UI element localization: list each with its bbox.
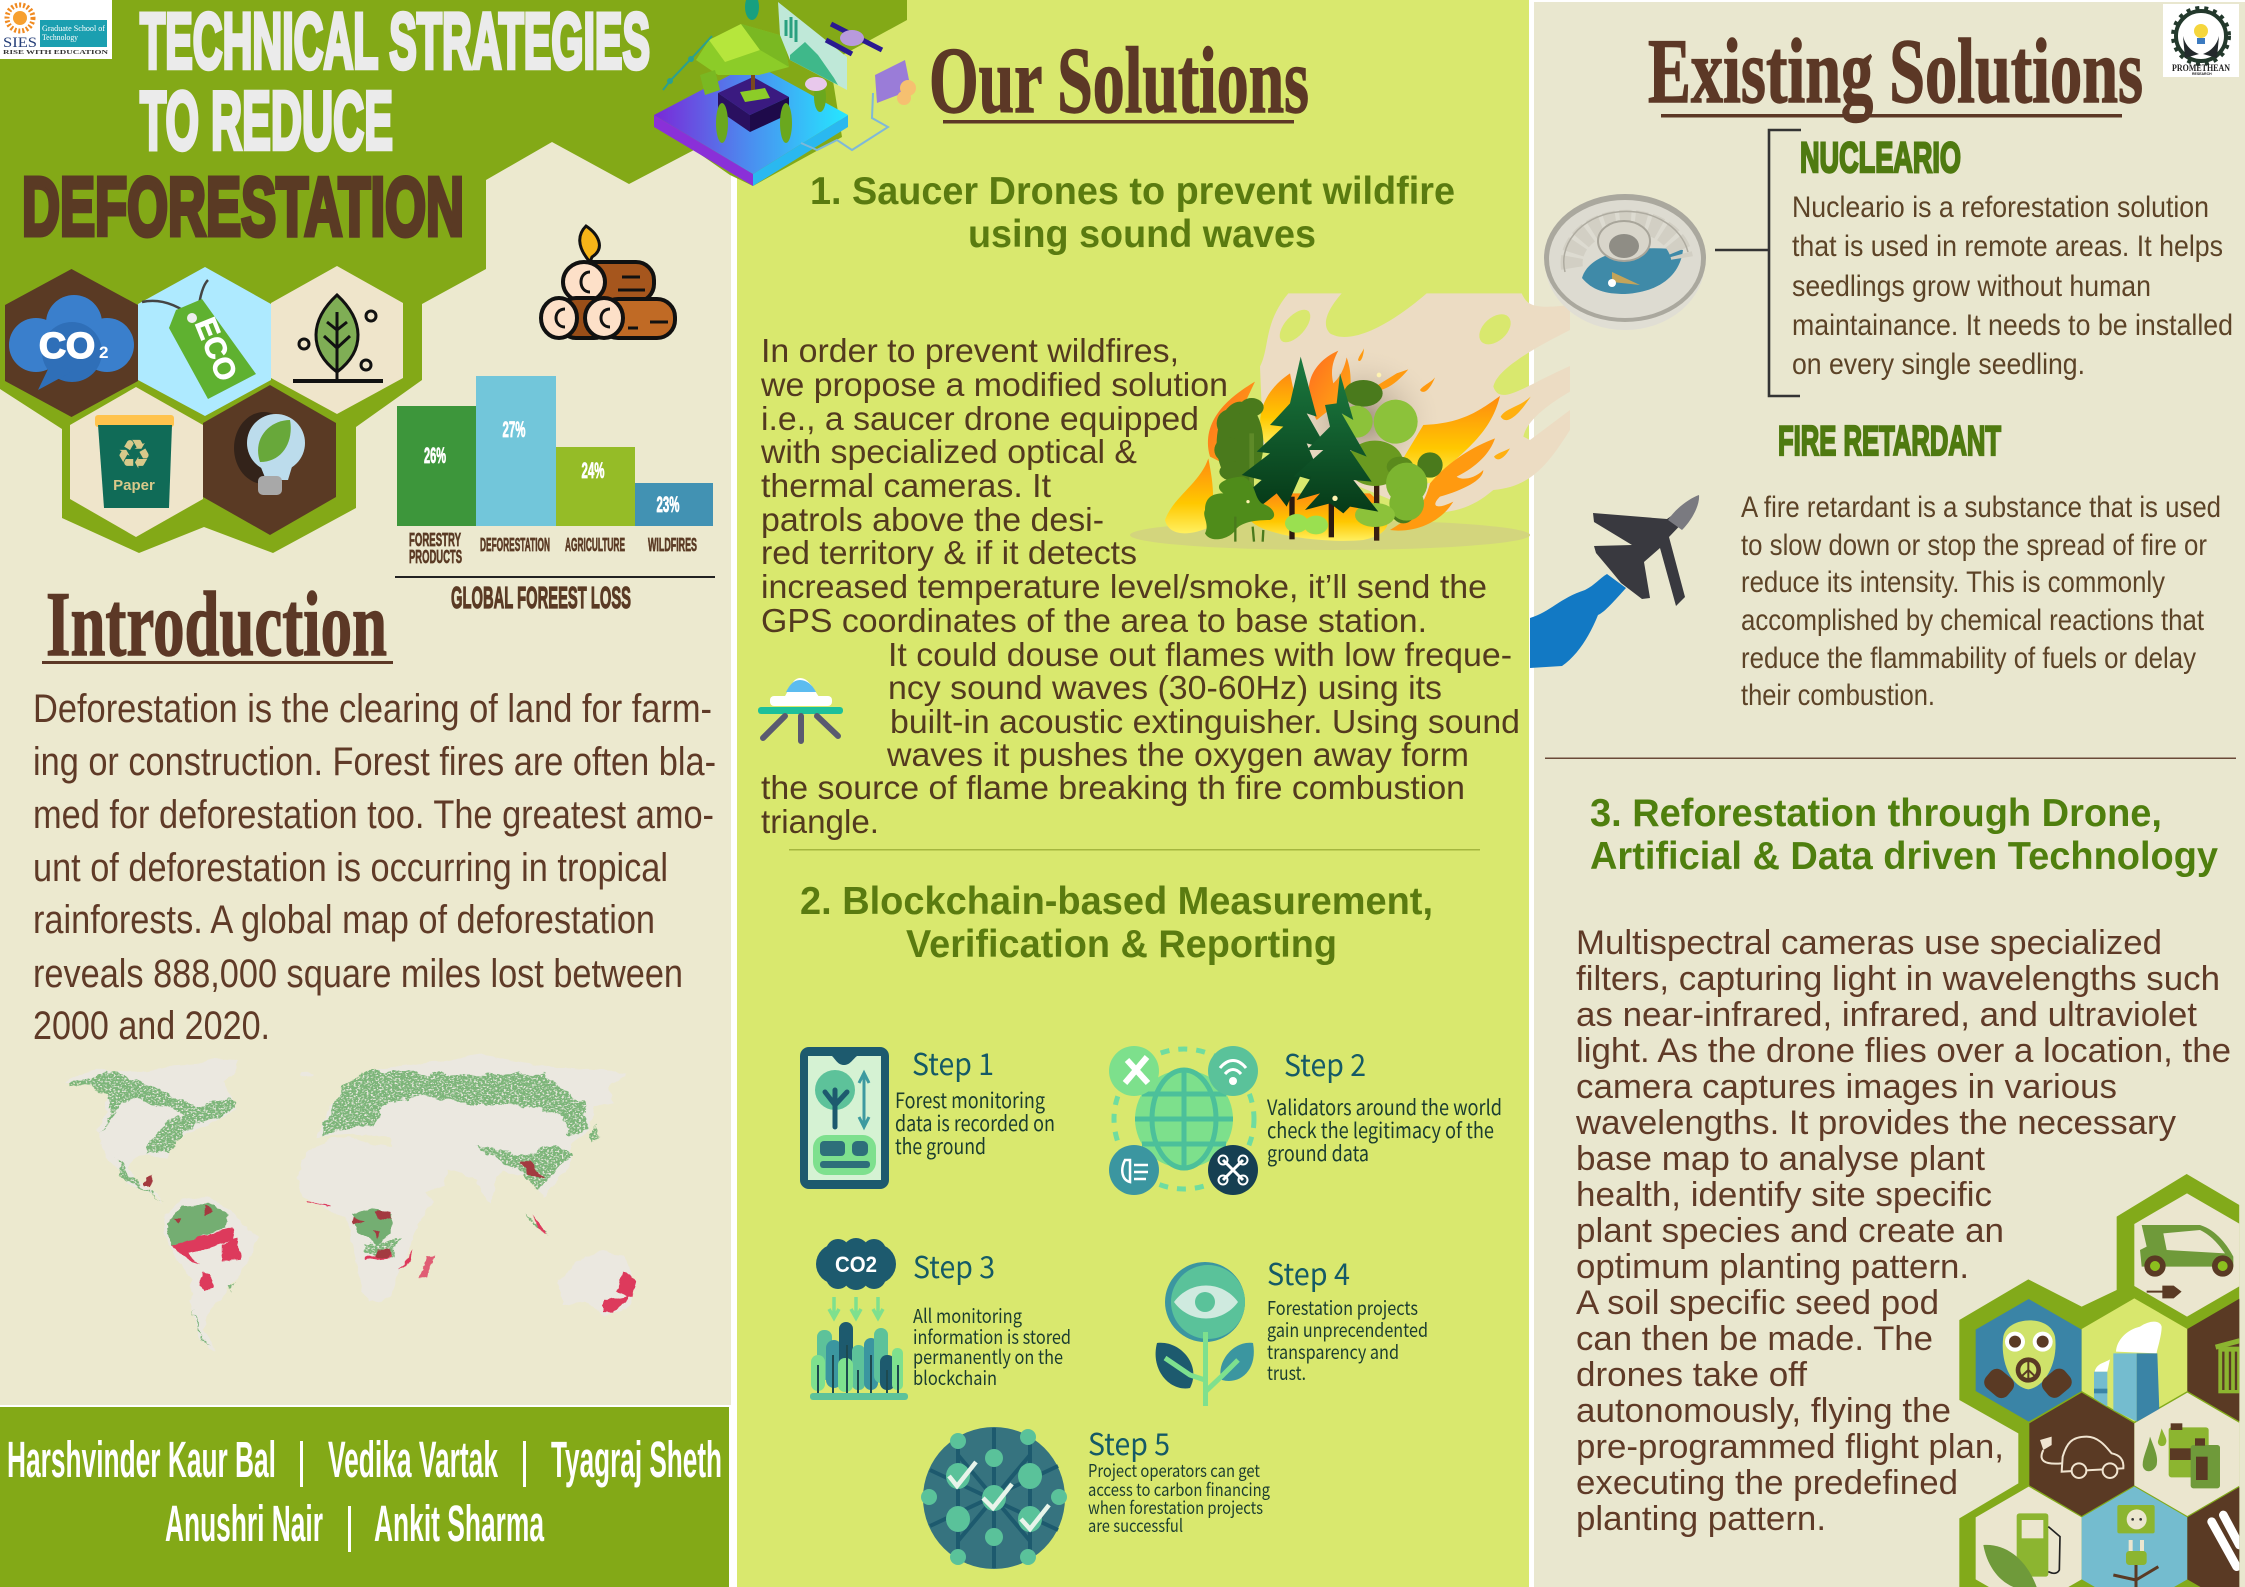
- chart category labels: PRODUCTS: [409, 547, 462, 567]
- hexagon: CO2 cloud: 2: [99, 343, 108, 362]
- bar: forestry products 26%: 26%: [424, 443, 446, 468]
- step 2 label: Step 2: [1284, 1041, 1366, 1085]
- logo: SIES: [0, 0, 112, 59]
- panel: left column background: [0, 0, 731, 1405]
- panel: authors footer: Vedika Vartak: [328, 1431, 498, 1488]
- logo: SIES: RISE WITH EDUCATION: [3, 50, 109, 56]
- step 3 label: Step 3: [913, 1243, 995, 1287]
- text block: introduction: med for deforestation too. The greatest amo-: [33, 793, 714, 837]
- hexagon: ECO tag: [138, 267, 271, 416]
- step 1: [800, 1040, 1055, 1189]
- step 1 text: [895, 1085, 1055, 1161]
- text block: solution 1 description: triangle.: [761, 803, 879, 840]
- text block: introduction: unt of deforestation is occurring in tropical: [33, 846, 668, 890]
- heading: solution 3: 3. Reforestation through Drone,: [1590, 792, 2162, 835]
- text block: solution 3 description: Multispectral cameras use specialized: [1576, 924, 2162, 962]
- text block: introduction: ing or construction. Forest fires are often bla-: [33, 740, 716, 784]
- bar: deforestation 27%: 27%: [502, 417, 526, 442]
- icon: nucleario device: [1544, 194, 1706, 330]
- hexagon: socket and plug: [2082, 1487, 2187, 1587]
- heading: solution 3: Artificial & Data driven Technology: [1590, 835, 2218, 878]
- hexagon: CO2 cloud: CO: [39, 325, 95, 366]
- text block: solution 1 description: built-in acoustic extinguisher. Using sound: [890, 703, 1520, 740]
- step 3 text: All monitoring: [913, 1302, 1022, 1329]
- text block: solution 3 description: as near-infrared, infrared, and ultraviolet: [1576, 996, 2198, 1034]
- text block: solution 3 description: drones take off: [1576, 1356, 1808, 1394]
- text block: nucleario: seedlings grow without human: [1792, 270, 2151, 303]
- icon: plane spraying retardant: [1530, 495, 1699, 668]
- text block: solution 3 description: base map to analyse plant: [1576, 1140, 1986, 1178]
- hexagon: bio fuel pump: [1976, 1487, 2082, 1587]
- bar chart: global forest loss: WILDFIRES: [648, 535, 697, 555]
- step 1 label: Step 1: [912, 1040, 994, 1084]
- text block: solution 3 description: optimum planting pattern.: [1576, 1248, 1969, 1286]
- icon: CO2 cloud over trees: [810, 1238, 908, 1400]
- bar: agriculture 24%: 24%: [582, 458, 604, 483]
- panel: authors footer: [0, 1407, 729, 1587]
- text block: solution 1 description: patrols above the desi-: [761, 501, 1104, 538]
- world map of deforestation: [66, 1054, 637, 1350]
- hexagon: factory: [2082, 1298, 2187, 1422]
- text block: introduction: 2000 and 2020.: [33, 1004, 270, 1048]
- heading: Fire retardant: FIRE RETARDANT: [1778, 417, 2001, 464]
- logo: SIES: Graduate School of: [42, 24, 105, 33]
- icon: globe with nodes: [1109, 1046, 1258, 1195]
- title: TO REDUCE: [140, 74, 393, 167]
- text block: introduction: reveals 888,000 square miles lost between: [33, 952, 683, 996]
- hexagon: ECO tag: ECO: [188, 313, 243, 386]
- logo: Promethean: [2163, 4, 2239, 77]
- text block: solution 1 description: It could douse out flames with low freque-: [888, 636, 1512, 673]
- step 1 text: the ground: [895, 1131, 986, 1161]
- icon: verified network globe: [921, 1427, 1067, 1569]
- text block: solution 3 description: light. As the drone flies over a location, the: [1576, 1032, 2231, 1070]
- heading: Our Solutions: Our Solutions: [929, 29, 1309, 133]
- panel: authors footer: Harshvinder Kaur Bal: [7, 1431, 276, 1488]
- step 4 text: gain unprecendented: [1267, 1316, 1428, 1343]
- heading: Introduction: Introduction: [46, 573, 387, 675]
- chart category labels: DEFORESTATION: [480, 535, 550, 555]
- step 5: [921, 1420, 1270, 1569]
- bar: wildfires 23%: 23%: [656, 492, 680, 517]
- connector bracket: [1715, 130, 1801, 396]
- text block: solution 3 description: plant species and create an: [1576, 1212, 2004, 1250]
- step 5 label: Step 5: [1088, 1420, 1170, 1464]
- step 3 text: blockchain: [913, 1364, 997, 1391]
- hexagon: paper bin: Paper: [113, 477, 155, 494]
- icon: hexagon grid: [5, 266, 403, 537]
- hexagon: gas mask: [1976, 1299, 2082, 1422]
- heading: solution 1: [810, 170, 1455, 256]
- step 2 text: check the legitimacy of the: [1267, 1115, 1494, 1145]
- step 1 text: data is recorded on: [895, 1108, 1055, 1138]
- icon: log pile: [541, 226, 675, 338]
- text block: introduction: [33, 687, 716, 1048]
- step 5 text: when forestation projects: [1088, 1495, 1263, 1520]
- step 3 text: permanently on the: [913, 1343, 1063, 1370]
- heading: solution 1: using sound waves: [968, 213, 1316, 256]
- text block: solution 3 description: autonomously, flying the: [1576, 1392, 1951, 1430]
- icon: eye flower: [1156, 1262, 1254, 1406]
- step 2 text: Validators around the world: [1267, 1092, 1502, 1122]
- heading: Our Solutions: [929, 29, 1309, 133]
- text block: solution 3 description: A soil specific seed pod: [1576, 1284, 1939, 1322]
- step 1 text: Forest monitoring: [895, 1085, 1045, 1115]
- step 3 text: information is stored: [913, 1323, 1071, 1350]
- hexagon: electric car: [2134, 1193, 2240, 1317]
- icon: CO2 cloud over trees: CO2: [835, 1252, 877, 1277]
- hexagon: paper bin: ♻: [116, 432, 152, 478]
- chart category labels: [409, 530, 697, 567]
- heading: Nucleario: NUCLEARIO: [1800, 134, 1961, 182]
- text block: solution 3 description: [1575, 924, 2231, 1538]
- text block: solution 3 description: wavelengths. It provides the necessary: [1575, 1104, 2176, 1142]
- text block: solution 3 description: filters, capturing light in wavelengths such: [1576, 960, 2220, 998]
- step 5 text: are successful: [1088, 1513, 1183, 1538]
- text block: solution 1 description: with specialized optical &: [760, 433, 1137, 470]
- text block: solution 1 description: waves it pushes the oxygen away form: [886, 736, 1469, 773]
- step 5 text: [1088, 1458, 1270, 1538]
- text block: fire retardant: their combustion.: [1741, 679, 1935, 712]
- text block: solution 1 description: GPS coordinates of the area to base station.: [761, 602, 1427, 639]
- panel: authors footer: Ankit Sharma: [374, 1495, 544, 1552]
- step 3: [810, 1238, 1071, 1400]
- text block: solution 3 description: planting pattern.: [1576, 1500, 1826, 1538]
- step 4 label: Step 4: [1267, 1250, 1350, 1294]
- step 4 text: [1267, 1294, 1428, 1386]
- bar: agriculture 24%: [556, 447, 635, 526]
- hexagon: leaf: [271, 266, 403, 414]
- panel: authors footer: Tyagraj Sheth: [551, 1431, 722, 1488]
- icon: saucer drone: [758, 678, 843, 741]
- text block: solution 1 description: increased temperature level/smoke, it’ll send the: [761, 568, 1487, 605]
- title: DEFORESTATION: [22, 160, 464, 253]
- panel: centre column background: [737, 0, 1529, 1587]
- chart category labels: FORESTRY: [409, 530, 461, 550]
- illustration: burning forest: [1130, 293, 1570, 550]
- text block: solution 3 description: pre-programmed flight plan,: [1576, 1428, 2004, 1466]
- title: [22, 0, 650, 253]
- step 4 text: transparency and: [1267, 1338, 1399, 1365]
- hexagon: bottles: [2134, 1393, 2240, 1516]
- hexagon: ev charging: [2029, 1393, 2134, 1516]
- bar chart: global forest loss: GLOBAL FOREEST LOSS: [451, 580, 631, 615]
- text block: solution 3 description: camera captures images in various: [1576, 1068, 2117, 1106]
- text block: solution 3 description: executing the predefined: [1576, 1464, 1958, 1502]
- heading: Introduction: [42, 573, 393, 675]
- heading: solution 3: [1590, 792, 2218, 878]
- icon: phone with tree: [800, 1047, 889, 1189]
- text block: fire retardant: reduce its intensity. This is commonly: [1741, 566, 2165, 599]
- text block: fire retardant: [1741, 491, 2221, 712]
- logo: SIES: SIES: [3, 35, 37, 51]
- text block: introduction: Deforestation is the clearing of land for farm-: [33, 687, 712, 731]
- text block: solution 1 description: i.e., a saucer drone equipped: [761, 400, 1199, 437]
- green hexagonal header shape: [0, 0, 907, 553]
- step 4 text: trust.: [1267, 1359, 1306, 1386]
- step 3 text: [913, 1302, 1071, 1391]
- step 2 text: [1267, 1092, 1502, 1168]
- bar chart: global forest loss: [395, 376, 715, 615]
- icon: isometric tree platform: [654, 0, 916, 186]
- hexagon: paper bin: [70, 387, 203, 537]
- panel: authors footer: Anushri Nair: [165, 1495, 323, 1552]
- icon: green technology hexagon cluster: [1959, 1174, 2245, 1587]
- step 5 text: access to carbon financing: [1088, 1477, 1270, 1502]
- logo: Promethean: RESEARCH: [2192, 72, 2212, 76]
- text block: solution 3 description: can then be made. The: [1576, 1320, 1933, 1358]
- text block: solution 1 description: we propose a modified solution: [760, 366, 1228, 403]
- step 2 text: ground data: [1267, 1138, 1369, 1168]
- step 2: [1109, 1041, 1502, 1195]
- heading: solution 2: [800, 880, 1433, 966]
- heading: solution 1: 1. Saucer Drones to prevent wildfire: [810, 170, 1455, 213]
- text block: nucleario: on every single seedling.: [1792, 348, 2085, 381]
- text block: solution 3 description: health, identify site specific: [1576, 1176, 1992, 1214]
- panel: right column background: [1534, 2, 2245, 1587]
- step 4: [1156, 1250, 1428, 1406]
- step 5 text: Project operators can get: [1088, 1458, 1260, 1483]
- bar: deforestation 27%: [476, 376, 556, 526]
- heading: solution 2: Verification & Reporting: [906, 923, 1337, 966]
- heading: solution 2: 2. Blockchain-based Measurement,: [800, 880, 1433, 923]
- text block: introduction: rainforests. A global map of deforestation: [33, 898, 655, 942]
- step 4 text: Forestation projects: [1267, 1294, 1418, 1321]
- bar: forestry products 26%: [397, 406, 476, 526]
- text block: solution 1 description: red territory & if it detects: [761, 534, 1137, 571]
- logo: SIES: Technology: [42, 33, 78, 42]
- hexagon: CO2 cloud: [5, 269, 138, 417]
- text block: solution 1 description: In order to prevent wildfires,: [761, 332, 1179, 369]
- hexagon: trash: [2187, 1298, 2245, 1422]
- text block: solution 1 description: the source of flame breaking th fire combustion: [761, 769, 1465, 806]
- text block: solution 1 description: [760, 332, 1520, 840]
- hexagon: bulb: [203, 385, 336, 535]
- text block: nucleario: [1792, 191, 2233, 381]
- text block: solution 1 description: ncy sound waves (30-60Hz) using its: [888, 669, 1442, 706]
- bar: wildfires 23%: [635, 483, 713, 526]
- logo: Promethean: PROMETHEAN: [2172, 63, 2230, 73]
- chart category labels: AGRICULTURE: [565, 535, 625, 555]
- hexagon: energy saving lamp: [2187, 1487, 2245, 1587]
- text block: solution 1 description: thermal cameras. It: [761, 467, 1051, 504]
